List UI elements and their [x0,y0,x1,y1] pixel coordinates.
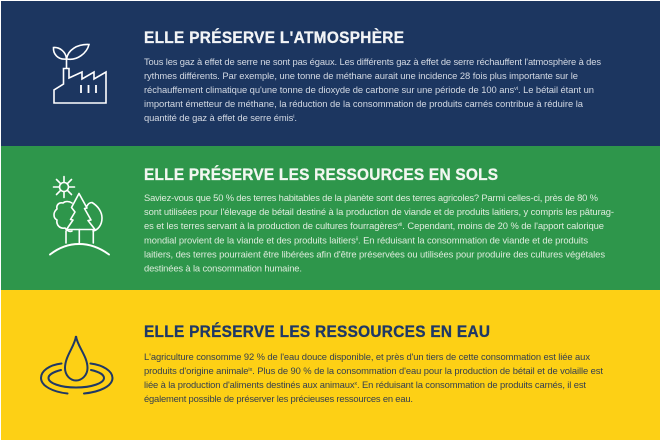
panel: atmosphere [1,1,660,146]
heading: water: ELLE PRÉSERVE LES RESSOURCES EN EAU [144,322,490,341]
text block: soils: . En réduisant la consommation de viande et de produits [358,234,588,246]
heading: atmosphere: ELLE PRÉSERVE L'ATMOSPHÈRE [144,28,404,47]
text block: atmosphere: quantité de gaz à effet de serre émis [144,112,293,123]
icon: sun, trees and hill [50,176,109,254]
text block: water: x [354,381,357,387]
text block: soils: . Cependant, moins de 20 % de l'apport calorique [402,220,604,231]
text block: soils: Saviez-vous que 50 % des terres habitables de la planète sont des terres agricoles? Parmi celles-ci, près de 80 % [144,192,598,203]
text block: water: liée à la production d'aliments destinés aux animaux [144,379,355,390]
panel: soils [1,146,660,290]
text block: water: L'agriculture consomme 92 % de l'eau douce disponible, et près d'un tiers de cette consommation est liée aux [144,351,590,362]
text block: water: . En réduisant la consommation de produits carnés, il est [357,379,586,390]
text block: atmosphere: i [293,114,294,120]
icon: factory with sprout [53,44,106,103]
text block: atmosphere: . [294,112,297,123]
text block: atmosphere: vi [514,86,518,92]
text block: water: . Plus de 90 % de la consommation d'eau pour la production de bétail et de volaille est [252,365,603,376]
text block: soils: es et les terres servant à la production de cultures fourragères [144,220,397,231]
text block: water: ix [248,367,253,373]
panel: water [1,290,660,440]
text block: soils: mondial provient de la viande et des produits laitiers [144,234,356,246]
text block: soils: destinées à la consommation humaine. [144,262,302,274]
text block: atmosphere [144,56,601,123]
text block: soils: vii [397,222,402,228]
text block: atmosphere: réchauffement climatique qu'une tonne de dioxyde de carbone sur une période de 100 ans [144,84,514,95]
text block: water: produits d'origine animale [144,365,249,376]
text block: soils: sont utilisées pour l'élevage de bétail destiné à la production de viande et de produits laitiers, y compris les pâturag- [144,206,614,217]
text block: water [144,351,603,404]
text block: water: également possible de préserver les précieuses ressources en eau. [144,393,413,404]
text block: soils: laitiers, des terres pourraient être libérées afin d'être préservées ou utilisées pour produire des cultures végétales [144,248,605,260]
text block: soils [144,192,614,274]
icon: water drop with ripples [41,336,112,394]
text block: soils: ii [356,236,358,242]
heading: soils: ELLE PRÉSERVE LES RESSOURCES EN SOLS [144,165,498,184]
text block: atmosphere: important émetteur de méthane, la réduction de la consommation de produits carnés contribue à réduire la [144,98,584,109]
text block: atmosphere: . Le bétail étant un [518,84,594,95]
text block: atmosphere: rythmes différents. Par exemple, une tonne de méthane aurait une incidence 28 fois plus importante sur le [144,70,578,81]
text block: atmosphere: Tous les gaz à effet de serre ne sont pas égaux. Les différents gaz à effet de serre réchauffent l'atmosphère à des [144,56,601,67]
